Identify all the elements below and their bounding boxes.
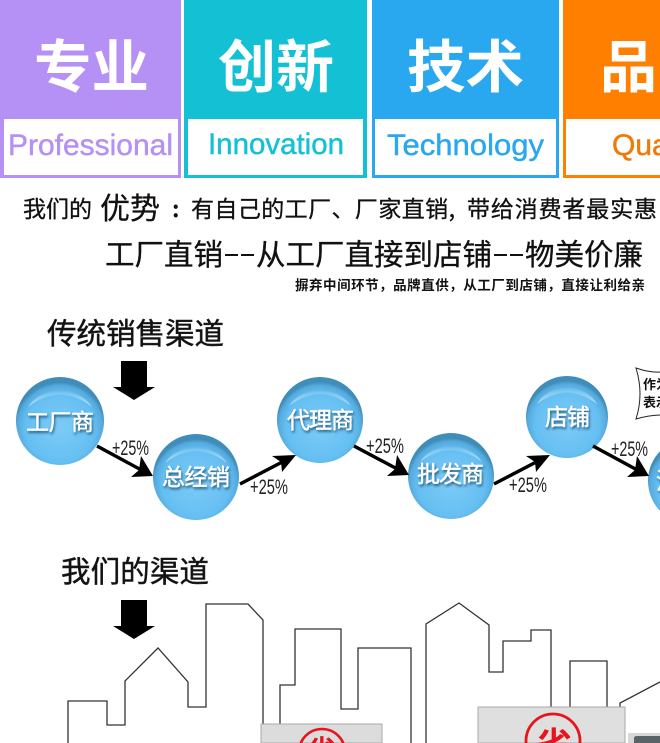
advantage line: 带给消费者最实惠 bbox=[467, 190, 657, 224]
label: +25%: +25% bbox=[509, 474, 547, 497]
slogan: 从工厂直接到店铺 bbox=[256, 232, 492, 274]
node: 批发商: 批发商 bbox=[417, 455, 484, 489]
heading: traditional channel: 传统销售渠道 bbox=[47, 311, 224, 353]
heading: 创新: 创新 bbox=[218, 22, 334, 104]
node: 店铺 bbox=[526, 376, 608, 458]
advantage line: : bbox=[172, 190, 179, 224]
arrow: down to traditional channel bbox=[113, 361, 155, 400]
city skyline bbox=[68, 603, 660, 743]
shop sign left bbox=[261, 724, 382, 743]
slogan: 物美价廉 bbox=[525, 232, 643, 274]
advantage line: 我们的 bbox=[23, 190, 92, 224]
subtitle: 摒弃中间环节，品牌直供，从工厂到店铺，直接让利给亲 bbox=[295, 274, 645, 294]
arrow: 批发商 to 店铺 bbox=[494, 455, 550, 484]
slogan bbox=[105, 232, 643, 274]
node: 代理商 bbox=[277, 377, 363, 463]
callout bbox=[636, 368, 660, 419]
arrow: 代理商 to 批发商 bbox=[354, 446, 409, 476]
arrow: 总经销 to 代理商 bbox=[240, 455, 296, 484]
label: Technology: Technology bbox=[387, 129, 544, 162]
slogan: 工厂直销 bbox=[105, 232, 223, 274]
advantage line bbox=[23, 184, 657, 228]
node: 批发商 bbox=[408, 433, 494, 519]
truck cab bbox=[628, 733, 660, 743]
node: 总经销: 总经销 bbox=[162, 458, 230, 492]
label: +25%: +25% bbox=[366, 435, 404, 458]
arrow: 工厂商 to 总经销 bbox=[97, 446, 153, 477]
shop sign right bbox=[478, 707, 625, 743]
node: 总经销 bbox=[153, 434, 239, 520]
node: 店铺: 店铺 bbox=[545, 398, 590, 432]
node: 工厂商: 工厂商 bbox=[26, 403, 94, 437]
node: 工厂商 bbox=[16, 377, 104, 465]
advantage line: 优势 bbox=[100, 184, 160, 228]
advantage line: 有自己的工厂、厂家直销, bbox=[191, 190, 455, 224]
node: 代理商: 代理商 bbox=[287, 401, 354, 435]
panel: innovation bbox=[184, 0, 367, 178]
arrow: down to our channel bbox=[113, 600, 155, 639]
label: +25%: +25% bbox=[250, 476, 288, 499]
heading: 专业: 专业 bbox=[34, 22, 149, 104]
panel: technology bbox=[372, 0, 559, 178]
panel: quality bbox=[563, 0, 660, 178]
panel: professional bbox=[0, 0, 181, 178]
node: 消费者 bbox=[648, 438, 660, 524]
heading: our channel: 我们的渠道 bbox=[61, 549, 209, 591]
label: +25%: +25% bbox=[112, 437, 149, 460]
label: Innovation: Innovation bbox=[208, 128, 344, 161]
heading: 技术: 技术 bbox=[407, 22, 524, 104]
arrow: 店铺 to 消费者 bbox=[593, 446, 649, 477]
label: Professional: Professional bbox=[8, 129, 173, 162]
